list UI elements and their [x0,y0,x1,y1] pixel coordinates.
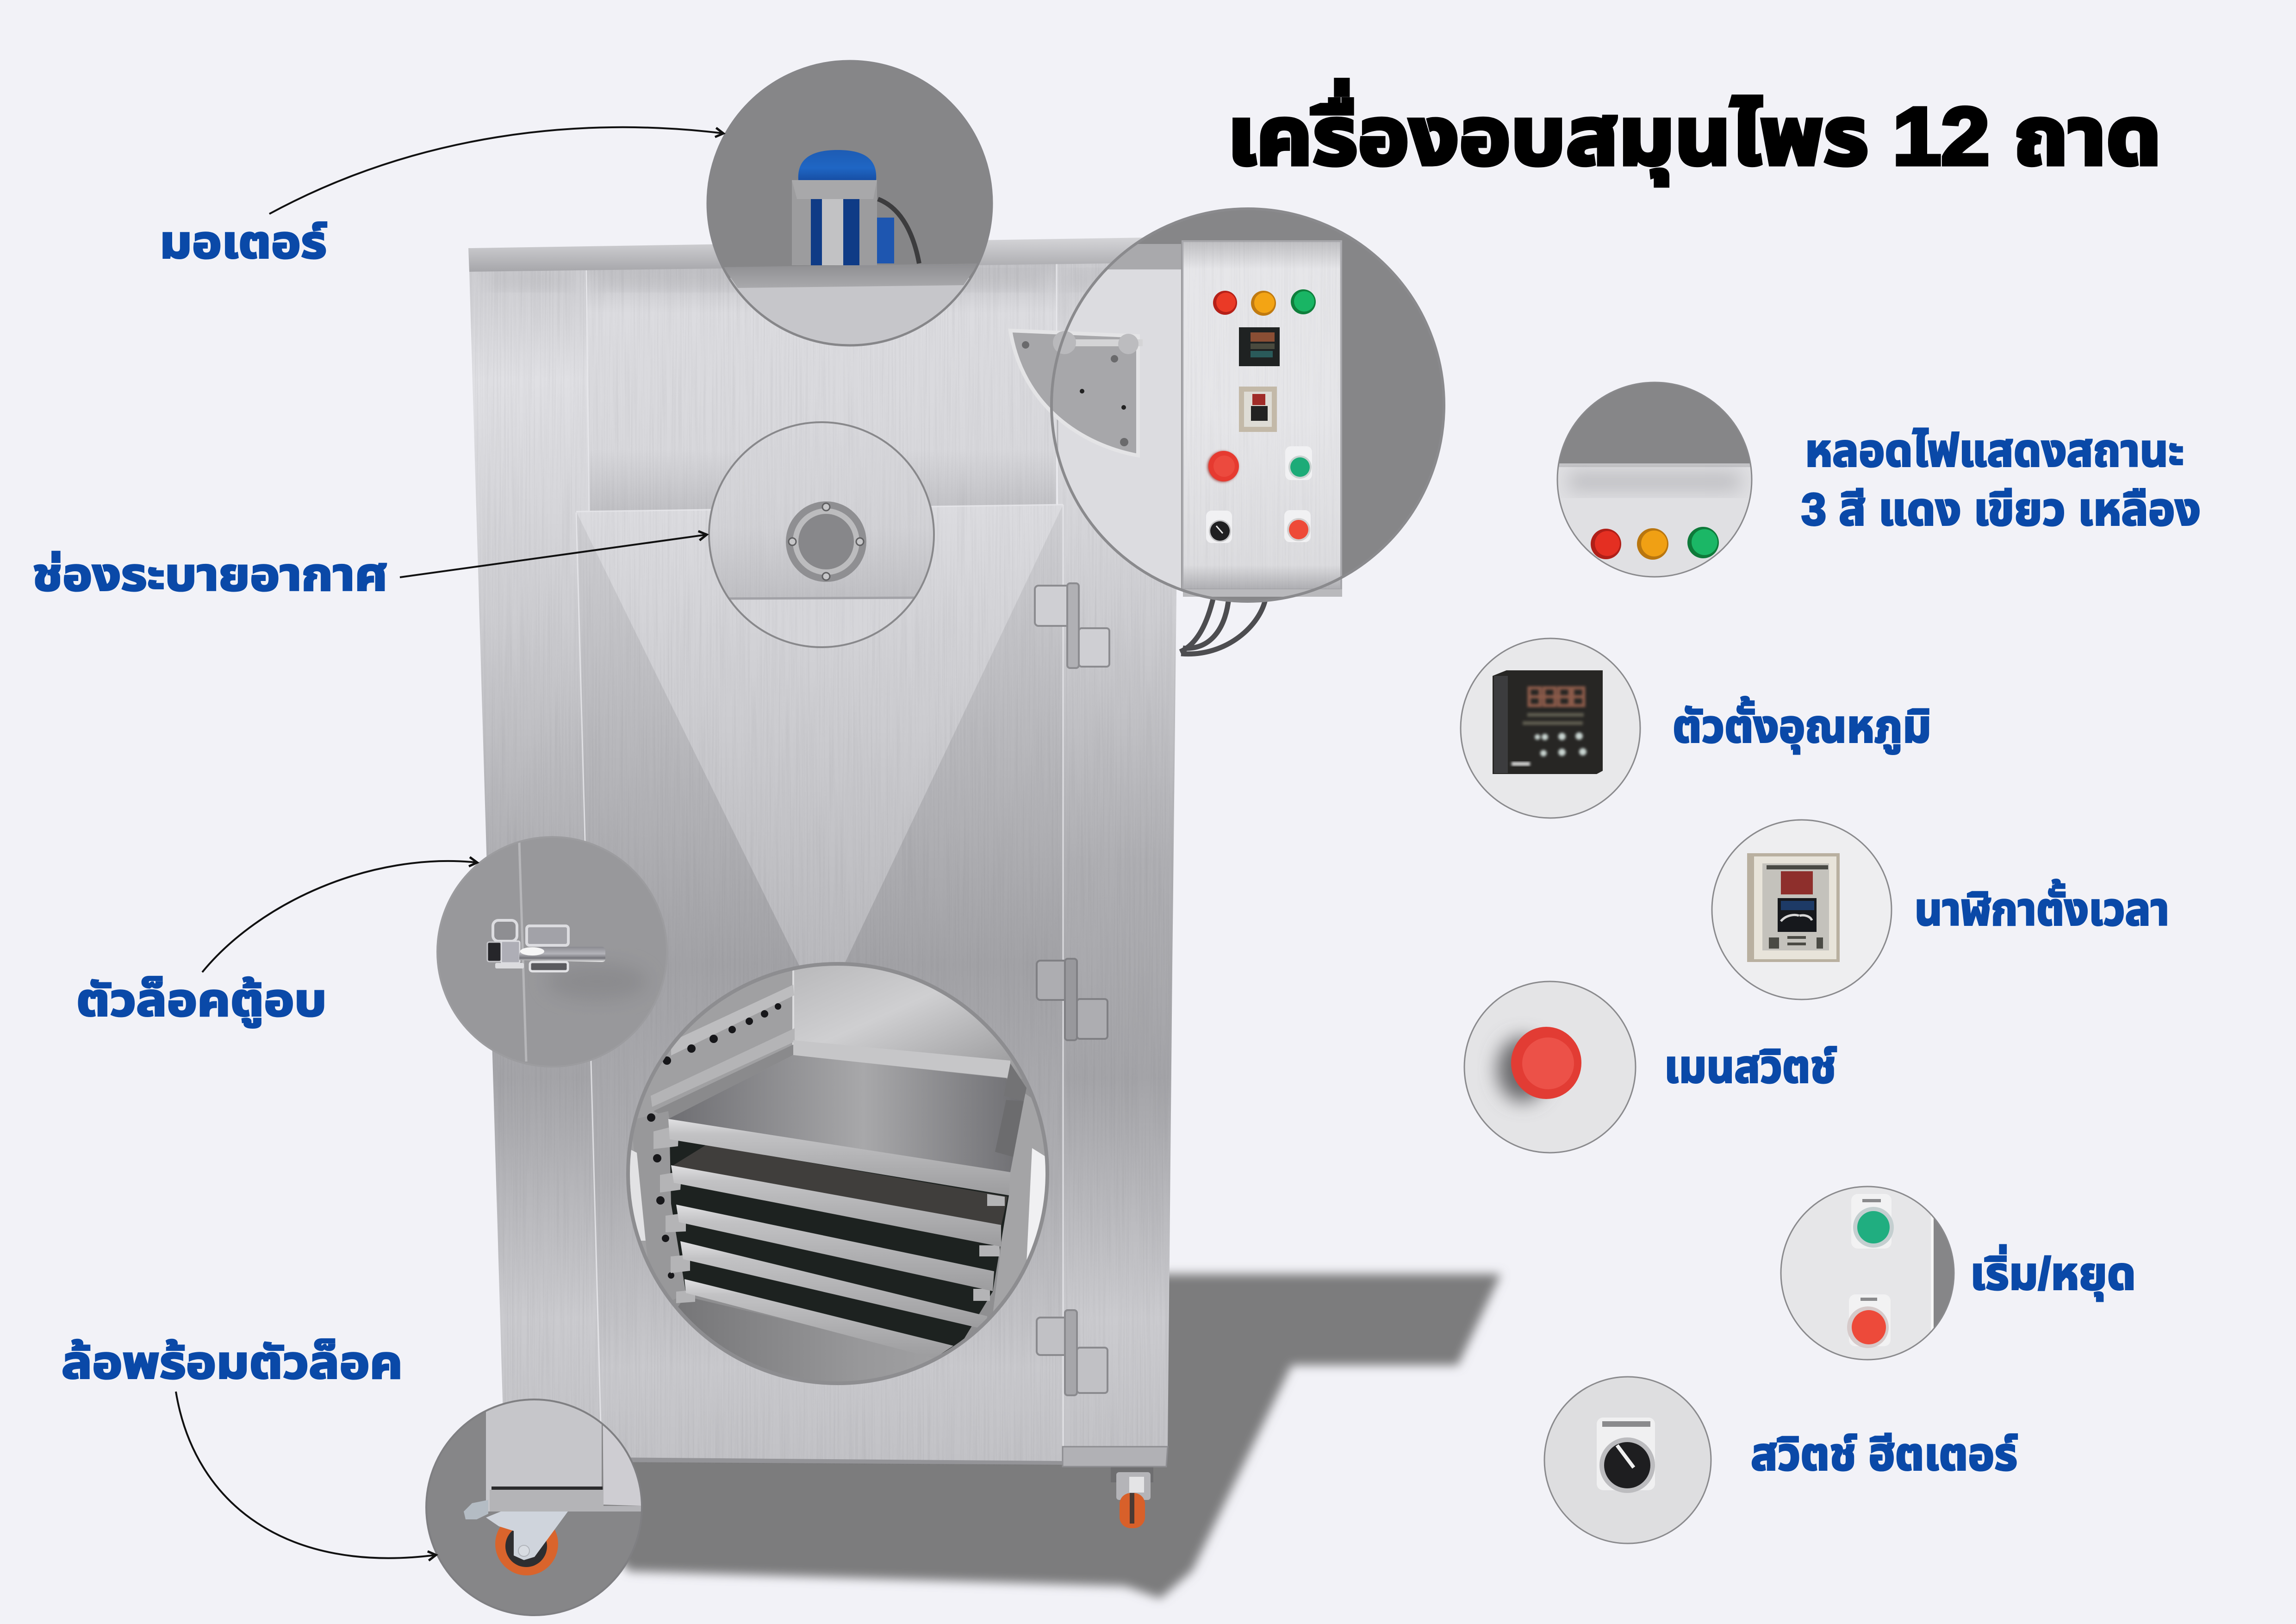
bottom hinge [1037,1310,1108,1395]
dark tray cavities [670,1139,1009,1356]
cabinet right column [1057,262,1180,1449]
latch [487,920,605,971]
timer [1747,853,1840,962]
callout: temperature controller zoom [1461,638,1640,818]
timer [1239,387,1277,432]
label: timer: นาฬิกาตั้งเวลา [1915,879,2169,935]
stop button [1847,1294,1891,1348]
label: temperature controller: ตัวตั้งอุณหภูมิ [1673,696,1931,754]
callout: heater switch zoom [1544,1377,1711,1543]
arrow: latch [202,861,477,972]
label: status lamps [1801,425,2201,535]
upper panel [586,263,1057,512]
door hinges [1035,583,1109,1395]
callout: door latch [437,837,667,1067]
heater switch [1206,511,1232,543]
caster [464,1500,568,1575]
label: status lamps: 3 สี แดง เขียว เหลือง [1801,484,2201,535]
reflection smudges [491,273,1171,287]
door [576,505,1063,1463]
label: start stop: เริ่ม/หยุด [1970,1245,2136,1301]
right wall [990,1093,1051,1370]
panel box [1182,241,1342,597]
tray 5 [684,1279,953,1358]
callout: status lamps zoom [1555,382,1754,579]
perforated rail [651,985,795,1119]
red button [1511,1027,1581,1099]
brushed metal texture [463,231,1185,1472]
cabinet below rim [730,278,969,344]
cabinet body [463,231,1185,1472]
back wall [793,963,1052,1079]
rim [723,263,978,288]
bottom step plate [1063,1447,1168,1467]
status lamps [1213,289,1316,316]
door V reflection [576,505,1063,972]
start button [1851,1194,1894,1249]
callout: motor [706,60,993,346]
selector knob [1597,1418,1655,1493]
floor shadow [555,1274,1501,1599]
callout: vent [709,422,935,649]
top hinge [1035,583,1109,668]
handle plate [1010,331,1143,456]
tray 3 [676,1205,994,1291]
motor icon [792,150,919,265]
label: status lamps: หลอดไฟแสดงสถานะ [1805,425,2184,476]
tray side tabs [1004,1063,1027,1101]
display digits [1529,688,1584,706]
callout: timer zoom [1712,820,1892,999]
stop button [1284,510,1311,542]
arrow: vent [400,535,706,577]
door bottom edge [602,1457,1063,1465]
left wall [625,963,793,1273]
left rack [630,1111,690,1301]
callout: main switch zoom [1464,981,1636,1153]
arrow: motor [269,127,723,214]
caption lines [1523,713,1584,725]
top tray surface [668,1055,1024,1172]
temperature controller [1239,327,1280,366]
vent grille [786,501,866,582]
panel seam lines [576,263,1063,1458]
floor [625,1296,1018,1389]
buttons [1535,732,1587,756]
right caster wheel [1111,1467,1153,1528]
cabinet left column [469,269,602,1463]
rear lip [793,1040,1010,1078]
label: wheel: ล้อพร้อมตัวล็อค [62,1337,403,1388]
start button [1285,446,1312,480]
tray 4 [680,1241,987,1330]
callout: trays in door opening [625,963,1052,1389]
label: vent: ช่องระบายอากาศ [32,549,388,600]
top rim [468,237,1180,272]
lamps [1591,527,1719,560]
main switch [1207,451,1239,482]
callout: control panel [1010,209,1444,616]
arrow: wheel [176,1392,436,1558]
cabinet column in callout [1053,269,1181,588]
middle hinge [1037,959,1108,1040]
callout: locking wheel [426,1398,643,1615]
label: heater switch: สวิตช์ ฮีตเตอร์ [1751,1429,2017,1480]
label: motor: มอเตอร์ [160,217,327,268]
callout: start stop zoom [1781,1185,1956,1361]
title: เครื่องอบสมุนไพร 12 ถาด [1227,80,2161,186]
controller [1493,670,1603,774]
label: latch: ตัวล็อคตู้อบ [76,974,327,1028]
control panel cables [1180,597,1266,654]
tray 1 [668,1119,1010,1195]
label: main switch: เมนสวิตช์ [1664,1041,1836,1092]
tray 2 [671,1165,1001,1247]
